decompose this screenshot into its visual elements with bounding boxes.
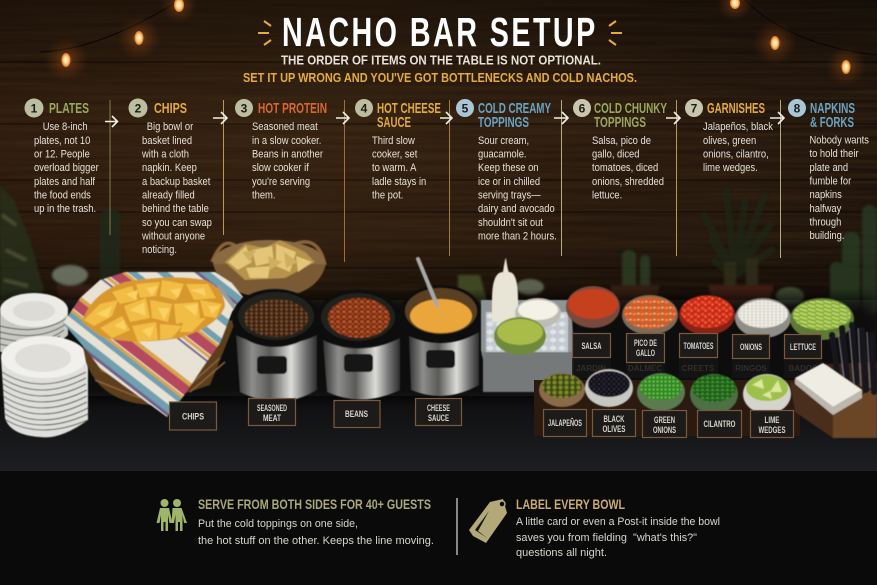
card: lime wedges: LIME [764,415,780,425]
icon: title sunburst right [609,21,622,45]
table front drop [0,471,877,585]
card: black olives [592,410,636,436]
card: cheese sauce [416,398,462,426]
slow cooker: seasoned meat [232,289,318,402]
step 2: chips: basket lined [142,135,192,147]
card: cheese sauce: CHEESE [427,403,450,413]
icon: two people [156,499,187,531]
step 2: chips: already filled [142,190,195,202]
card: green onions: ONIONS [653,425,676,435]
step 1: plates: overload bigger [34,162,99,174]
step 2: chips: napkin. Keep [142,162,197,174]
upper bowls [566,286,854,340]
step 6: cold chunky toppings: COLD CHUNKY [594,100,667,117]
step 8: napkins and forks: Nobody wants [810,135,869,147]
step 1: plates: plates and half [34,176,95,188]
step 4: hot cheese sauce: HOT CHEESE [377,100,441,117]
plate stacks [0,293,88,437]
step 7: garnishes [685,99,774,174]
step 7: garnishes: Jalapeños, black [703,121,774,133]
slow cooker: cheese sauce [400,259,482,396]
card: lime wedges: WEDGES [758,425,786,435]
big chip basket with striped cloth [63,272,247,417]
step 5: cold creamy toppings: more than 2 hours. [478,231,557,243]
card: lettuce [784,334,822,358]
step 7: garnishes: 7 [691,102,698,116]
arrows between steps [105,112,784,127]
card: seasoned meat: SEASONED [257,403,287,413]
step 7: garnishes: olives, green [703,135,756,147]
dim reflected card row behind lower bowls [572,358,822,378]
step 8: napkins and forks: fumble for [810,176,852,188]
table back shadow [0,300,877,396]
card: cheese sauce: SAUCE [428,413,449,423]
step 4: hot cheese sauce: 4 [361,102,368,116]
step 3: hot protein: HOT PROTEIN [258,100,327,117]
dim reflected card row behind lower bowls: RINGOS [735,364,767,373]
card: black olives: BLACK [604,414,625,424]
step 5: cold creamy toppings: COLD CREAMY [478,100,551,117]
step 2: chips [128,98,212,256]
step 6: cold chunky toppings: onions, shredded [592,176,664,188]
step 8: napkins and forks: & FORKS [810,114,854,131]
step 4: hot cheese sauce: SAUCE [377,114,411,131]
tip: label every bowl: saves you from fielding "what's this?" [516,532,697,544]
step 5: cold creamy toppings: 5 [462,102,469,116]
step 6: cold chunky toppings: tomatoes, diced [592,162,658,174]
step 1: plates [24,98,99,215]
step 8: napkins and forks: NAPKINS [810,100,855,117]
step 1: plates: Use 8-inch [43,121,88,133]
step 3: hot protein: 3 [241,102,248,116]
step 3: hot protein: them. [252,190,275,202]
step 5: cold creamy toppings: dairy and avocado [478,203,555,215]
step 4: hot cheese sauce: the pot. [372,190,403,202]
card: jalapenos: JALAPEÑOS [548,418,582,428]
card: lime wedges [750,410,794,438]
background: rustic wood wall [0,0,877,400]
step 2: chips: noticing. [142,244,177,256]
dim reflected card row behind lower bowls: DALMEC [628,364,662,373]
card: tomatoes [680,334,718,358]
step 2: chips: CHIPS [154,100,187,117]
card: seasoned meat: MEAT [263,413,281,423]
tip: label every bowl: questions all night. [516,547,607,559]
step 8: napkins and forks [788,99,869,242]
step 8: napkins and forks: building. [810,230,844,242]
tip: label every bowl: LABEL EVERY BOWL [516,496,625,512]
slow cookers [232,259,482,402]
bowl: onions [735,298,791,338]
step 2: chips: Big bowl or [147,121,194,133]
tip: serve from both sides: the hot stuff on the other. Keeps the line moving. [198,535,434,547]
step 2: chips: without anyone [141,231,205,243]
tip: label every bowl: A little card or even a Post-it inside the bowl [516,516,720,528]
bowl: tomatoes [679,295,735,335]
bowl: green onions [637,373,685,411]
step 5: cold creamy toppings: TOPPINGS [478,114,529,131]
card: cilantro [698,410,742,438]
card: jalapenos [544,410,586,436]
step 8: napkins and forks: through [810,217,841,229]
step 5: cold creamy toppings: Sour cream, [478,135,529,147]
step 6: cold chunky toppings: TOPPINGS [594,114,646,131]
card: onions: ONIONS [740,342,762,352]
card: pico de gallo: PICO DE [634,338,657,348]
wooden riser for lower bowls [534,380,800,436]
step 7: garnishes: onions, cilantro, [703,149,769,161]
step 6: cold chunky toppings: gallo, diced [592,149,639,161]
step 2: chips: so you can swap [142,217,212,229]
step 1: plates: 1 [31,102,38,116]
step 1: plates: or 12. People [34,149,90,161]
step 1: plates: up in the trash. [34,203,96,215]
card: green onions [642,410,686,438]
step 8: napkins and forks: napkins [810,189,842,201]
napkin and fork caddy [790,325,877,438]
bowl: salsa [566,286,620,328]
column dividers [110,100,780,262]
card: chips: CHIPS [182,412,204,422]
card: lettuce: LETTUCE [790,342,816,352]
step 2: chips: 2 [135,102,142,116]
step 3: hot protein: in a slow cooker. [252,135,321,147]
step 4: hot cheese sauce [355,99,441,202]
card: beans: BEANS [345,409,368,419]
step 6: cold chunky toppings [573,99,667,202]
string lights [40,0,877,86]
step 8: napkins and forks: plate and [810,162,848,174]
tip: label every bowl [516,496,720,559]
icon: label tag [469,499,507,543]
step 4: hot cheese sauce: Third slow [372,135,415,147]
step 1: plates: PLATES [49,100,89,117]
step 8: napkins and forks: to hold their [810,148,859,160]
step 2: chips: a backup basket [142,176,211,188]
step 5: cold creamy toppings: serving trays— [478,190,541,202]
step 6: cold chunky toppings: lettuce. [592,190,622,202]
subtitle line 1: THE ORDER OF ITEMS ON THE TABLE IS NOT OPTIONAL. [281,54,601,68]
step 8: napkins and forks: halfway [810,203,842,215]
food name cards [170,334,822,438]
card: seasoned meat [248,398,296,426]
bowl: lettuce [790,298,854,340]
card: salsa: SALSA [582,341,602,351]
step 4: hot cheese sauce: to warm. A [372,162,417,174]
tip: serve from both sides [198,496,434,547]
step 7: garnishes: lime wedges. [703,162,758,174]
step 5: cold creamy toppings [456,99,557,243]
step 2: chips: with a cloth [141,149,189,161]
step 6: cold chunky toppings: Salsa, pico de [592,135,651,147]
step 3: hot protein: Seasoned meat [252,121,318,133]
small back basket of chips [212,240,326,298]
card: green onions: GREEN [654,415,675,425]
bowl: cilantro [690,374,738,414]
card: onions [732,334,770,358]
card: beans [334,400,380,428]
step 1: plates: plates, not 10 [34,135,91,147]
tip: serve from both sides: SERVE FROM BOTH SIDES FOR 40+ GUESTS [198,496,431,512]
card: pico de gallo: GALLO [636,348,655,358]
step 3: hot protein: Beans in another [252,149,324,161]
step 6: cold chunky toppings: 6 [579,102,586,116]
step 5: cold creamy toppings: guacamole. [478,149,527,161]
step 3: hot protein [235,99,327,202]
bowl: pico de gallo [622,295,678,335]
icon: title sunburst left [258,21,271,45]
tip: serve from both sides: Put the cold toppings on one side, [198,518,358,530]
card: tomatoes: TOMATOES [684,341,714,351]
dim reflected card row behind lower bowls: CREETS [682,364,715,373]
card: chips [170,402,216,430]
dim reflected card row behind lower bowls: BADOS [789,364,818,373]
step 7: garnishes: GARNISHES [707,100,765,117]
ice tray with sour cream, guacamole and crema bottle [481,258,574,392]
lower bowls [539,369,791,414]
card: cilantro: CILANTRO [704,419,736,429]
back plate stack [0,293,68,352]
step 5: cold creamy toppings: ice or in chilled [478,176,540,188]
step 3: hot protein: you're serving [252,176,310,188]
step 3: hot protein: slow cooker if [252,162,309,174]
bowl: lime wedges [743,374,791,414]
bowl: jalapenos [539,373,585,407]
title: NACHO BAR SETUP [282,10,598,55]
dim reflected card row behind lower bowls: JARDIN [576,364,606,373]
bowl: black olives [585,369,633,407]
card: salsa [572,334,610,358]
step 4: hot cheese sauce: ladle stays in [372,176,426,188]
divider between tips [456,498,458,555]
step 2: chips: behind the table [142,203,209,215]
step 5: cold creamy toppings: shouldn't sit out [478,217,543,229]
card: pico de gallo [626,334,664,362]
slow cooker: beans [316,290,400,400]
front plate stack [1,336,88,437]
step 1: plates: the food ends [34,190,91,202]
subtitle line 2: SET IT UP WRONG AND YOU'VE GOT BOTTLENECKS AND COLD NACHOS. [243,71,637,85]
step 8: napkins and forks: 8 [794,102,801,116]
table surface [0,392,877,472]
card: black olives: OLIVES [602,424,626,434]
step 4: hot cheese sauce: cooker, set [372,149,418,161]
step 5: cold creamy toppings: Keep these on [478,162,539,174]
plants behind the table [0,186,877,315]
